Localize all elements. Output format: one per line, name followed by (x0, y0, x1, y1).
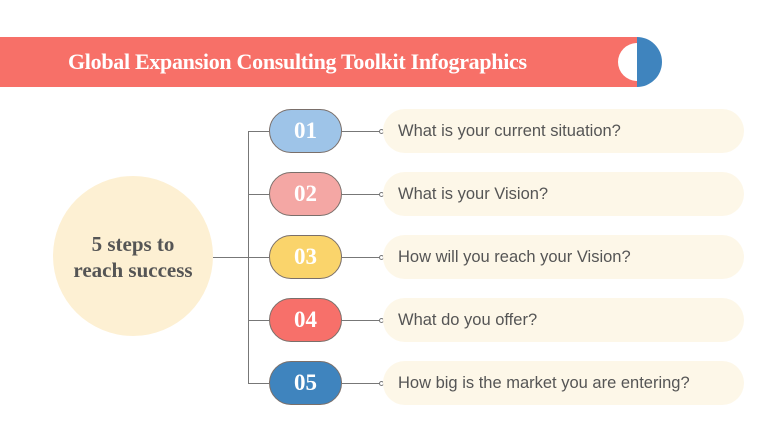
title banner (0, 37, 637, 87)
center label: reach success (73, 258, 193, 282)
step 04: What do you offer? (398, 311, 537, 329)
step 01: What is your current situation? (398, 122, 621, 140)
step 05: 05 (294, 370, 317, 395)
step 04: 04 (294, 307, 317, 332)
step 03: 03 (294, 244, 317, 269)
center circle (53, 176, 213, 336)
center label: 5 steps to (92, 232, 174, 256)
step 03: How will you reach your Vision? (398, 248, 631, 266)
center label (73, 232, 193, 282)
step 05 (269, 361, 744, 405)
step 02 (269, 172, 744, 216)
step 04 (269, 298, 744, 342)
step 01 (269, 109, 744, 153)
title: Global Expansion Consulting Toolkit Infographics (68, 49, 527, 74)
step 01: 01 (294, 118, 317, 143)
step 02: What is your Vision? (398, 185, 548, 203)
step 05: How big is the market you are entering? (398, 374, 690, 392)
step 03 (269, 235, 744, 279)
icon: half circles (618, 37, 662, 87)
step 02: 02 (294, 181, 317, 206)
